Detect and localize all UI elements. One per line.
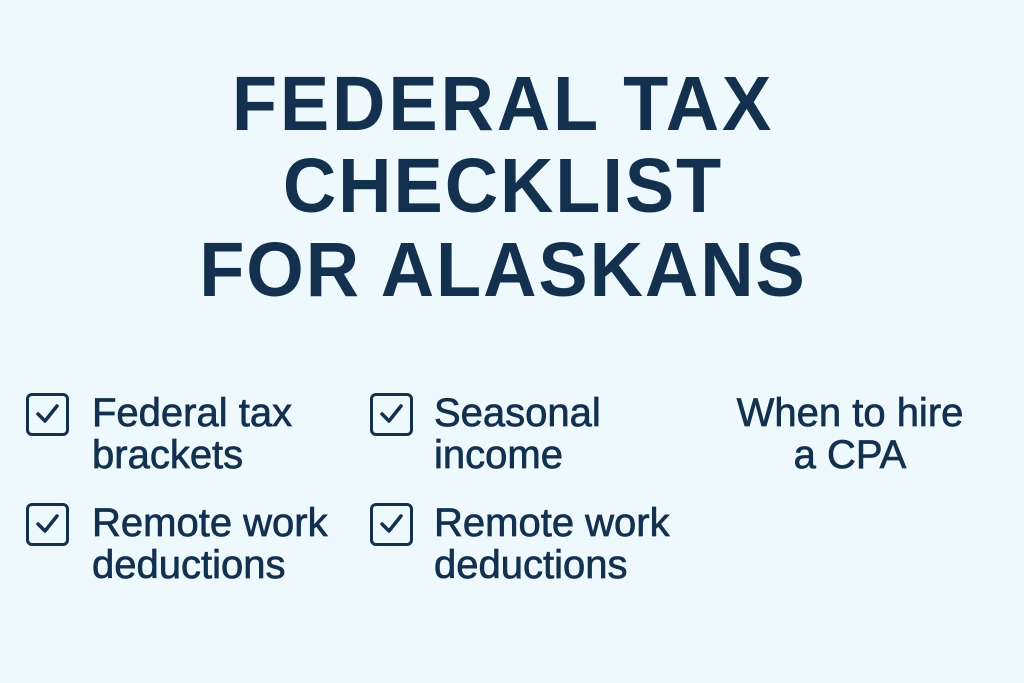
icon: checkbox xyxy=(370,393,413,436)
icon: checkbox xyxy=(370,503,413,546)
checklist item: remote work deductions 2: deductions xyxy=(434,543,627,587)
icon: checkbox xyxy=(26,503,69,546)
checklist item: when to hire a CPA: When to hire xyxy=(737,391,963,435)
icon: checkbox xyxy=(26,393,69,436)
checklist item: remote work deductions: Remote work xyxy=(92,501,328,545)
checklist item: when to hire a CPA: a CPA xyxy=(794,433,906,477)
checklist item: seasonal income: income xyxy=(434,433,563,477)
checklist item: seasonal income: Seasonal xyxy=(434,391,601,435)
checklist item: remote work deductions: deductions xyxy=(92,543,285,587)
checklist item: remote work deductions 2: Remote work xyxy=(434,501,670,545)
checklist item: remote work deductions xyxy=(26,501,328,587)
title: CHECKLIST xyxy=(283,143,723,229)
checklist item: federal tax brackets xyxy=(26,391,292,477)
checklist item: federal tax brackets: brackets xyxy=(92,433,243,477)
checklist item: seasonal income xyxy=(370,391,601,477)
title xyxy=(199,61,807,313)
checklist item: federal tax brackets: Federal tax xyxy=(92,391,292,435)
title: FEDERAL TAX xyxy=(232,61,774,147)
checklist item: remote work deductions 2 xyxy=(370,501,670,587)
title: FOR ALASKANS xyxy=(199,227,807,313)
checklist item: when to hire a CPA xyxy=(736,391,963,477)
